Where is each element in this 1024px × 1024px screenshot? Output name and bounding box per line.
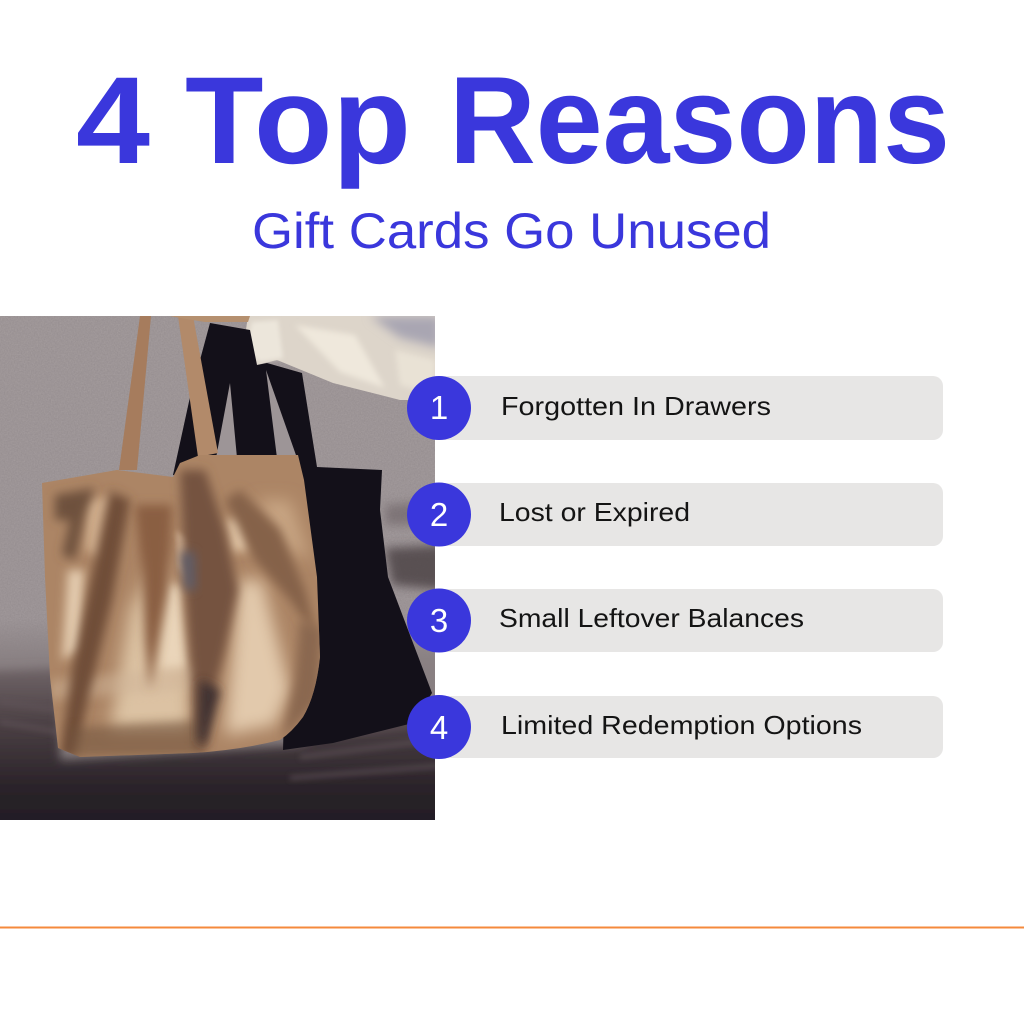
number badge 1 [407, 376, 471, 440]
list item 4: 4 [430, 709, 448, 746]
label 3: Small Leftover Balances [499, 603, 804, 633]
bag handle left [119, 316, 151, 470]
number badge 2 [407, 482, 471, 546]
list item 1 [407, 376, 943, 440]
label 1: Forgotten In Drawers [501, 391, 771, 421]
bag body [35, 450, 330, 765]
dark strap shadows [60, 490, 130, 757]
photo: canvas tote bag hanging against a wall [0, 316, 435, 820]
white fabric at top right [243, 316, 440, 400]
list item 3 [407, 588, 943, 652]
pill 4 [430, 696, 943, 758]
highlights [62, 570, 84, 660]
pill 2 [430, 483, 943, 546]
bag cast shadow [173, 323, 432, 750]
number badge 3 [407, 588, 471, 652]
pill 3 [430, 589, 943, 652]
label 2: Lost or Expired [499, 497, 690, 527]
number badge 4 [407, 695, 471, 759]
pill 1 [430, 376, 943, 440]
list item 2 [407, 482, 943, 546]
hand at the top [170, 316, 250, 322]
list item 4 [407, 695, 943, 759]
list item 3: 3 [430, 602, 448, 639]
title: Top [185, 52, 411, 190]
label 4: Limited Redemption Options [501, 710, 862, 740]
title: 4 [76, 52, 150, 190]
floor shadow area [0, 666, 435, 820]
list item 1: 1 [430, 389, 448, 426]
subtitle: Gift Cards Go Unused [252, 203, 771, 259]
title [76, 52, 950, 190]
list item 2: 2 [430, 496, 448, 533]
bag handle right [178, 316, 218, 457]
title: Reasons [449, 52, 950, 190]
dappled wall shadow right [385, 545, 445, 590]
